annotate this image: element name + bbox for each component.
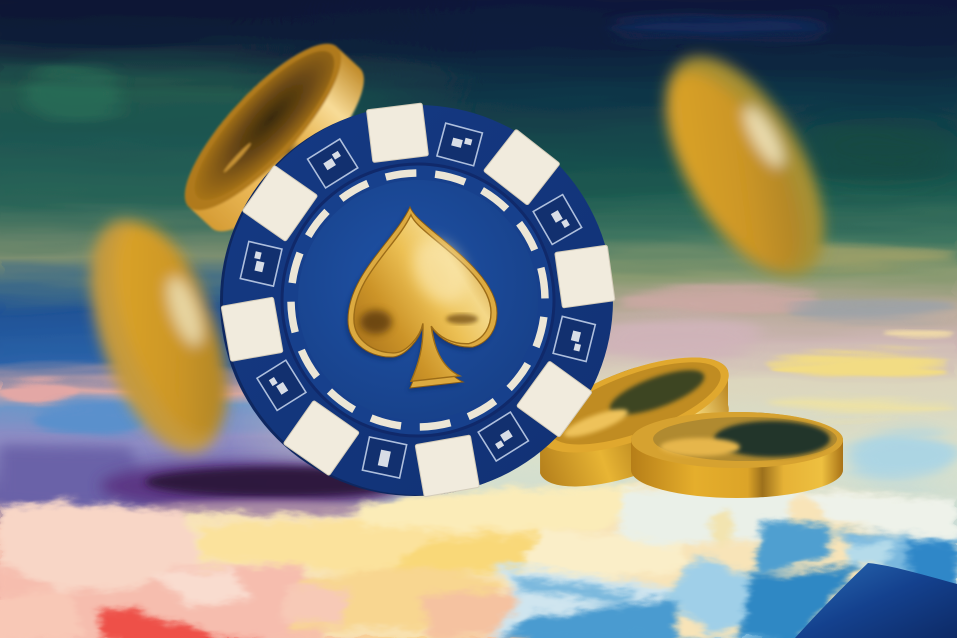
coin face xyxy=(631,412,843,468)
coin: stacked gold coin right xyxy=(631,412,843,498)
coin edge xyxy=(164,24,385,251)
chip: white edge blocks xyxy=(221,103,615,497)
coin: gold coin behind chip, top left xyxy=(164,24,385,251)
coin: blurred flying right xyxy=(634,31,856,301)
coin edge xyxy=(631,412,843,498)
spade: drop shadow xyxy=(346,210,495,391)
chip: white dashed ring xyxy=(291,173,545,427)
table: painted foreground strokes xyxy=(0,484,957,638)
coin edge xyxy=(517,338,751,506)
chip: outer rim xyxy=(223,105,613,495)
poker chip xyxy=(220,103,615,497)
coin: stacked gold coin left xyxy=(517,338,751,506)
chip: inner ring xyxy=(282,164,554,436)
chip: thickness edge xyxy=(220,106,610,496)
spade: dark right smudge xyxy=(446,314,478,324)
chip: center face xyxy=(298,180,538,420)
coin face xyxy=(164,24,362,230)
chip: square rim icons xyxy=(240,123,595,478)
spade: inner face xyxy=(354,215,491,381)
table: base strip along the bottom edge xyxy=(0,600,957,638)
table: lavender patch and shadow under chip xyxy=(0,445,415,519)
spade: highlight xyxy=(402,231,478,313)
spade: dark left smudge xyxy=(360,310,392,334)
dark blue block: bottom right corner xyxy=(795,563,957,638)
icon: gold spade xyxy=(346,207,497,391)
spade: gold rim xyxy=(348,207,497,388)
coin face xyxy=(528,338,740,472)
coin: blurred flying left xyxy=(64,202,254,470)
